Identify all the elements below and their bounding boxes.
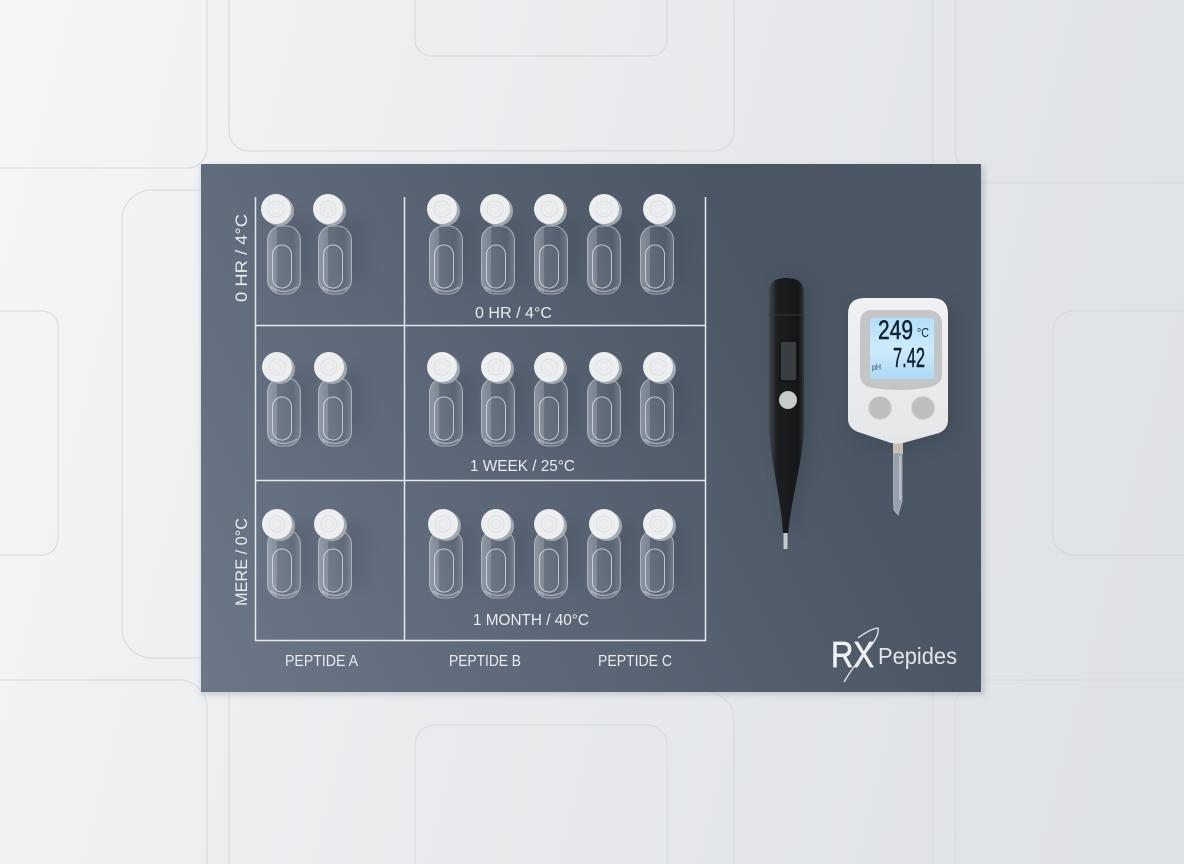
column label: peptide A: PEPTIDE A — [285, 653, 358, 670]
meter buttons — [868, 396, 934, 420]
meter screen: pH — [872, 363, 881, 372]
cell label: 1 week: 1 WEEK / 25°C — [470, 458, 575, 475]
meter screen: 7.42 — [893, 342, 925, 373]
row label: mere vertical: MERE / 0°C — [232, 518, 251, 606]
row label: 0 hr vertical: 0 HR / 4°C — [232, 214, 251, 302]
column label: peptide B: PEPTIDE B — [449, 653, 521, 670]
icon: digital thermometer — [769, 278, 811, 549]
meter probe — [893, 442, 903, 515]
meter housing — [848, 298, 948, 444]
column label: peptide C: PEPTIDE C — [598, 653, 672, 670]
cell label: 0 hr: 0 HR / 4°C — [475, 305, 552, 322]
meter screen: 249 — [878, 315, 913, 345]
icon: pH meter — [848, 298, 958, 515]
vial row: 0 hr — [261, 194, 687, 294]
logo: RX Pepides: RX — [831, 634, 874, 675]
cell label: 1 month: 1 MONTH / 40°C — [473, 612, 589, 629]
logo: RX Pepides: Pepides — [878, 643, 957, 669]
vial row: 1 week — [262, 352, 687, 446]
meter screen — [870, 315, 934, 379]
study grid lines — [256, 197, 706, 640]
meter screen: °C — [917, 325, 929, 340]
meter display bezel — [860, 310, 942, 390]
vial row: 1 month — [262, 509, 687, 598]
logo: RX Pepides — [831, 628, 957, 682]
board panel — [201, 164, 985, 695]
